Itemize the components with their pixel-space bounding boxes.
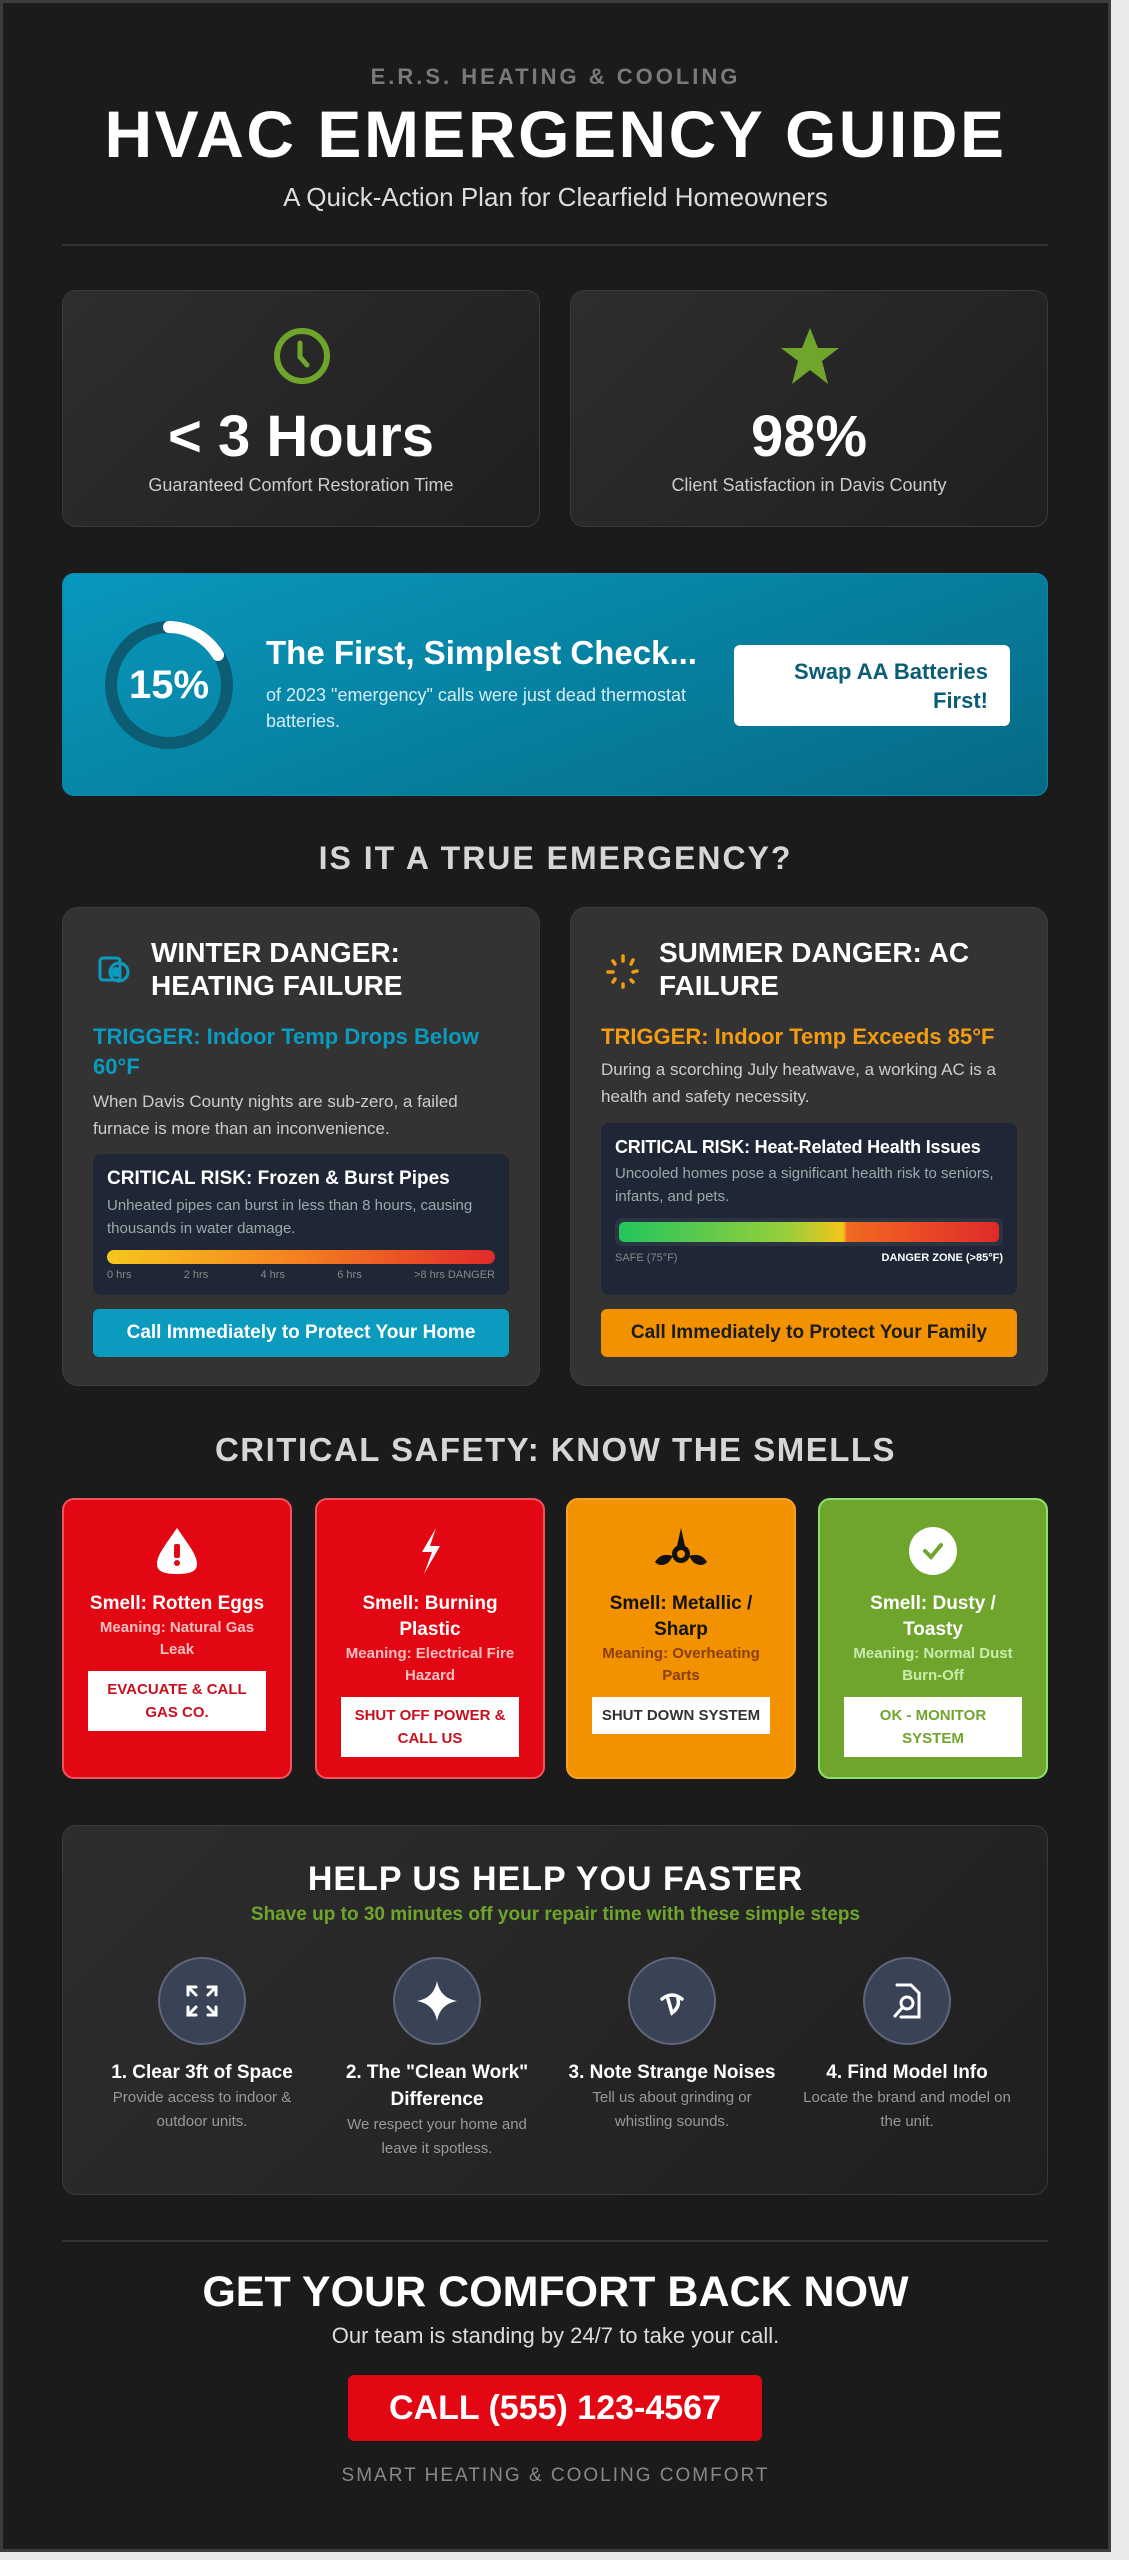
step 4: Locate the brand and model on the unit. <box>803 2089 1011 2130</box>
stat card: hours: < 3 Hours <box>168 404 434 469</box>
icon: sparkle <box>393 1957 481 2045</box>
panel: summer: FAILURE <box>659 970 779 1001</box>
callout button: Swap AA Batteries First! <box>794 659 988 713</box>
bar: hours <box>107 1250 495 1264</box>
heading: true emergency: IS IT A TRUE EMERGENCY? <box>319 840 792 876</box>
ring chart 15% <box>105 621 233 749</box>
icon: gas <box>157 1528 197 1574</box>
icon: fan <box>655 1528 707 1565</box>
panel: winter: TRIGGER: Indoor Temp Drops Below 60°F <box>93 1024 479 1079</box>
step 1: 1. Clear 3ft of Space <box>111 2062 293 2083</box>
footer: SMART HEATING & COOLING COMFORT <box>342 2465 769 2486</box>
risk box: pipes: 6 hrs <box>337 1269 362 1281</box>
panel: summer: During a scorching July heatwave, a working AC is a health and safety necessity. <box>601 1060 996 1106</box>
button: call home <box>93 1309 509 1357</box>
step 1: Provide access to indoor & outdoor units. <box>113 2089 291 2130</box>
risk box: pipes <box>93 1154 509 1295</box>
risk box: heat: DANGER ZONE (>85°F) <box>882 1252 1003 1264</box>
card: metallic: SHUT DOWN SYSTEM <box>602 1707 760 1724</box>
step 3: 3. Note Strange Noises <box>569 2062 775 2083</box>
card: rotten eggs: Meaning: Natural Gas Leak <box>100 1619 254 1658</box>
icon: expand <box>158 1957 246 2045</box>
panel: summer: SUMMER DANGER: AC <box>659 937 969 968</box>
button: call family <box>601 1309 1017 1357</box>
panel: summer <box>570 907 1048 1386</box>
CTA button: CALL (555) 123-4567 <box>389 2389 721 2427</box>
card: burning plastic: SHUT OFF POWER & CALL US <box>355 1707 505 1747</box>
risk box: heat: CRITICAL RISK: Heat-Related Health Issues <box>615 1137 981 1157</box>
stat card: satisfaction: Client Satisfaction in Davis County <box>671 475 947 495</box>
icon: clock <box>274 328 330 384</box>
card: rotten eggs: Smell: Rotten Eggs <box>90 1593 264 1614</box>
card: dusty <box>818 1498 1048 1779</box>
risk box: heat: SAFE (75°F) <box>615 1252 677 1264</box>
icon: check <box>909 1527 957 1575</box>
step 4 <box>803 1957 1011 2130</box>
card: rotten eggs <box>62 1498 292 1779</box>
step 2: 2. The "Clean Work" Difference <box>346 2062 528 2110</box>
risk box: pipes: >8 hrs DANGER <box>414 1269 495 1281</box>
risk box: pipes: Unheated pipes can burst in less than 8 hours, causing thousands in water damage. <box>107 1197 472 1237</box>
panel: summer: TRIGGER: Indoor Temp Exceeds 85°F <box>601 1024 994 1049</box>
heading: smells: CRITICAL SAFETY: KNOW THE SMELLS <box>215 1431 896 1468</box>
brand label: E.R.S. HEATING & COOLING <box>371 64 740 89</box>
card: dusty: Meaning: Normal Dust Burn-Off <box>853 1645 1013 1684</box>
card: burning plastic: Meaning: Electrical Fire Hazard <box>346 1645 514 1684</box>
card: burning plastic: Smell: Burning Plastic <box>362 1593 498 1640</box>
button: call family: Call Immediately to Protect Your Family <box>631 1322 987 1343</box>
panel: help us <box>62 1825 1048 2195</box>
CTA heading: GET YOUR COMFORT BACK NOW <box>202 2268 909 2316</box>
risk box: heat: Uncooled homes pose a significant health risk to seniors, infants, and pets. <box>615 1165 994 1205</box>
banner: battery check <box>62 573 1048 796</box>
card: dusty: Smell: Dusty / Toasty <box>870 1593 996 1640</box>
step 2: We respect your home and leave it spotless. <box>347 2116 527 2157</box>
risk box: pipes: 4 hrs <box>260 1269 285 1281</box>
stat card: hours <box>62 290 540 527</box>
stat card: satisfaction: 98% <box>751 404 867 469</box>
risk box: heat <box>601 1123 1017 1295</box>
callout button <box>734 645 1010 726</box>
ring chart 15%: 15% <box>129 663 209 707</box>
card: dusty: OK - MONITOR SYSTEM <box>880 1707 986 1747</box>
icon: sun <box>606 954 639 989</box>
panel: winter: WINTER DANGER: <box>151 937 400 968</box>
icon: bolt <box>422 1528 440 1574</box>
stat card: hours: Guaranteed Comfort Restoration Time <box>148 475 454 495</box>
step 3 <box>569 1957 775 2130</box>
icon: heater <box>98 956 130 982</box>
heading: help: HELP US HELP YOU FASTER <box>308 1860 803 1898</box>
panel: winter <box>62 907 540 1386</box>
card: rotten eggs: EVACUATE & CALL GAS CO. <box>107 1681 247 1721</box>
panel: winter: When Davis County nights are sub-zero, a failed furnace is more than an inconvenience. <box>93 1092 458 1138</box>
button: call home: Call Immediately to Protect Your Home <box>127 1322 475 1343</box>
icon: doc search <box>863 1957 951 2045</box>
risk box: pipes: CRITICAL RISK: Frozen & Burst Pipes <box>107 1168 450 1189</box>
stat card: satisfaction <box>570 290 1048 527</box>
bar: temperature <box>615 1218 1003 1246</box>
title: HVAC EMERGENCY GUIDE <box>104 97 1006 171</box>
icon: ear <box>628 1957 716 2045</box>
banner text <box>266 634 697 731</box>
CTA subtext: Our team is standing by 24/7 to take your call. <box>332 2323 779 2348</box>
subheading: help: Shave up to 30 minutes off your repair time with these simple steps <box>251 1904 860 1925</box>
step 3: Tell us about grinding or whistling sounds. <box>592 2089 752 2130</box>
banner text: The First, Simplest Check... <box>266 634 697 671</box>
risk box: pipes: 2 hrs <box>184 1269 208 1281</box>
risk box: pipes: 0 hrs <box>107 1269 131 1281</box>
card: metallic: Smell: Metallic / Sharp <box>610 1593 752 1640</box>
step 4: 4. Find Model Info <box>826 2062 988 2083</box>
panel: winter: HEATING FAILURE <box>151 970 402 1001</box>
step 2 <box>346 1957 528 2157</box>
card: metallic: Meaning: Overheating Parts <box>602 1645 760 1684</box>
card: burning plastic <box>315 1498 545 1779</box>
banner text: of 2023 "emergency" calls were just dead thermostat batteries. <box>266 685 686 731</box>
step 1 <box>111 1957 293 2130</box>
icon: star <box>781 328 839 384</box>
card: metallic <box>566 1498 796 1779</box>
CTA button <box>348 2375 762 2441</box>
tagline: A Quick-Action Plan for Clearfield Homeowners <box>283 182 828 212</box>
